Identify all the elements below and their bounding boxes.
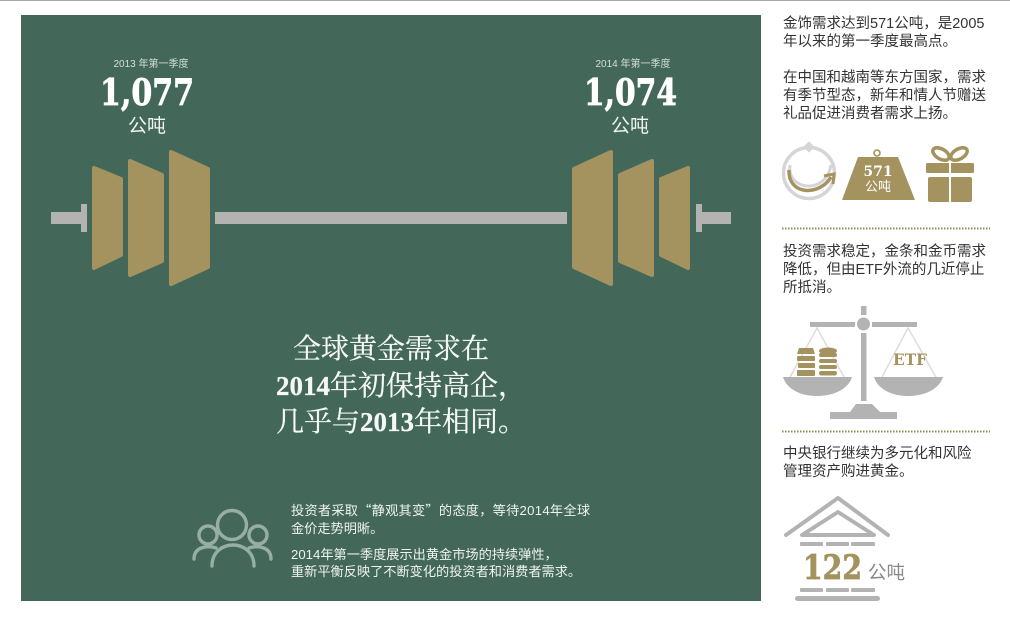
label: 2013 first quarter: 公吨	[128, 115, 166, 137]
text: jewellery demand: 金饰需求达到571公吨，是2005	[783, 15, 984, 32]
icon: gift box	[926, 145, 974, 202]
icon: 571 tonne weight	[842, 150, 915, 200]
divider	[782, 430, 990, 432]
text: investor commentary: 投资者采取“静观其变”的态度，等待2014年全球	[291, 500, 590, 519]
text: investor commentary	[291, 500, 590, 579]
icon: investors group	[194, 510, 271, 566]
headline: 全球黄金需求在	[293, 333, 489, 365]
text: central banks	[783, 445, 972, 480]
barbell bar	[215, 212, 567, 224]
panel: main green background	[21, 15, 761, 601]
label: 2013 first quarter: 1,077	[100, 72, 194, 114]
label: 2013 first quarter: 2013 年第一季度	[113, 57, 189, 70]
left gold plates	[94, 152, 208, 284]
text: jewellery demand	[783, 15, 986, 122]
text: jewellery demand: 有季节型态，新年和情人节赠送	[783, 87, 986, 104]
text: jewellery demand: 在中国和越南等东方国家，需求	[783, 68, 986, 86]
text: investment demand: 投资需求稳定，金条和金币需求	[783, 243, 986, 260]
divider	[782, 228, 990, 230]
label: 2014 first quarter: 1,074	[584, 72, 677, 114]
text: investor commentary: 重新平衡反映了不断变化的投资者和消费者需求。	[291, 564, 581, 579]
icon: balance scale	[783, 306, 943, 419]
headline: 2014年初保持高企，	[276, 370, 526, 402]
text: investment demand: 降低，但由ETF外流的几近停止	[783, 261, 984, 278]
icon: jewellery ring with arrow	[784, 141, 834, 198]
text: investment demand: 所抵消。	[783, 279, 841, 296]
label: 2014 first quarter: 2014 年第一季度	[595, 57, 671, 70]
ETF label: ETF	[893, 350, 928, 369]
icon: bank building 122 tonnes: 122	[803, 548, 862, 588]
right bar end	[696, 204, 731, 232]
text: jewellery demand: 年以来的第一季度最高点。	[783, 32, 957, 50]
text: investor commentary: 金价走势明晰。	[291, 521, 383, 536]
right gold plates	[574, 152, 688, 284]
icon: 571 tonne weight: 571	[863, 164, 893, 180]
icon: bank building 122 tonnes: 公吨	[868, 562, 905, 583]
text: jewellery demand: 礼品促进消费者需求上扬。	[783, 105, 957, 122]
left bar end	[51, 204, 87, 232]
gold coins	[819, 348, 837, 376]
headline: 几乎与2013年相同。	[276, 406, 526, 438]
icon: bank building 122 tonnes	[786, 498, 905, 601]
barbell graphic	[51, 152, 731, 284]
text: central banks: 管理资产购进黄金。	[783, 463, 914, 480]
text: central banks: 中央银行继续为多元化和风险	[783, 445, 972, 462]
headline	[276, 333, 526, 438]
scale right pan	[874, 377, 943, 396]
text: investor commentary: 2014年第一季度展示出黄金市场的持续弹性，	[291, 546, 558, 562]
icon: 571 tonne weight: 公吨	[865, 179, 891, 194]
text: investment demand	[783, 243, 986, 296]
label: 2014 first quarter: 公吨	[611, 115, 649, 137]
gold bars	[797, 348, 815, 376]
scale left pan	[783, 377, 852, 396]
label: 2013 first quarter	[100, 57, 194, 137]
label: 2014 first quarter	[584, 57, 677, 137]
